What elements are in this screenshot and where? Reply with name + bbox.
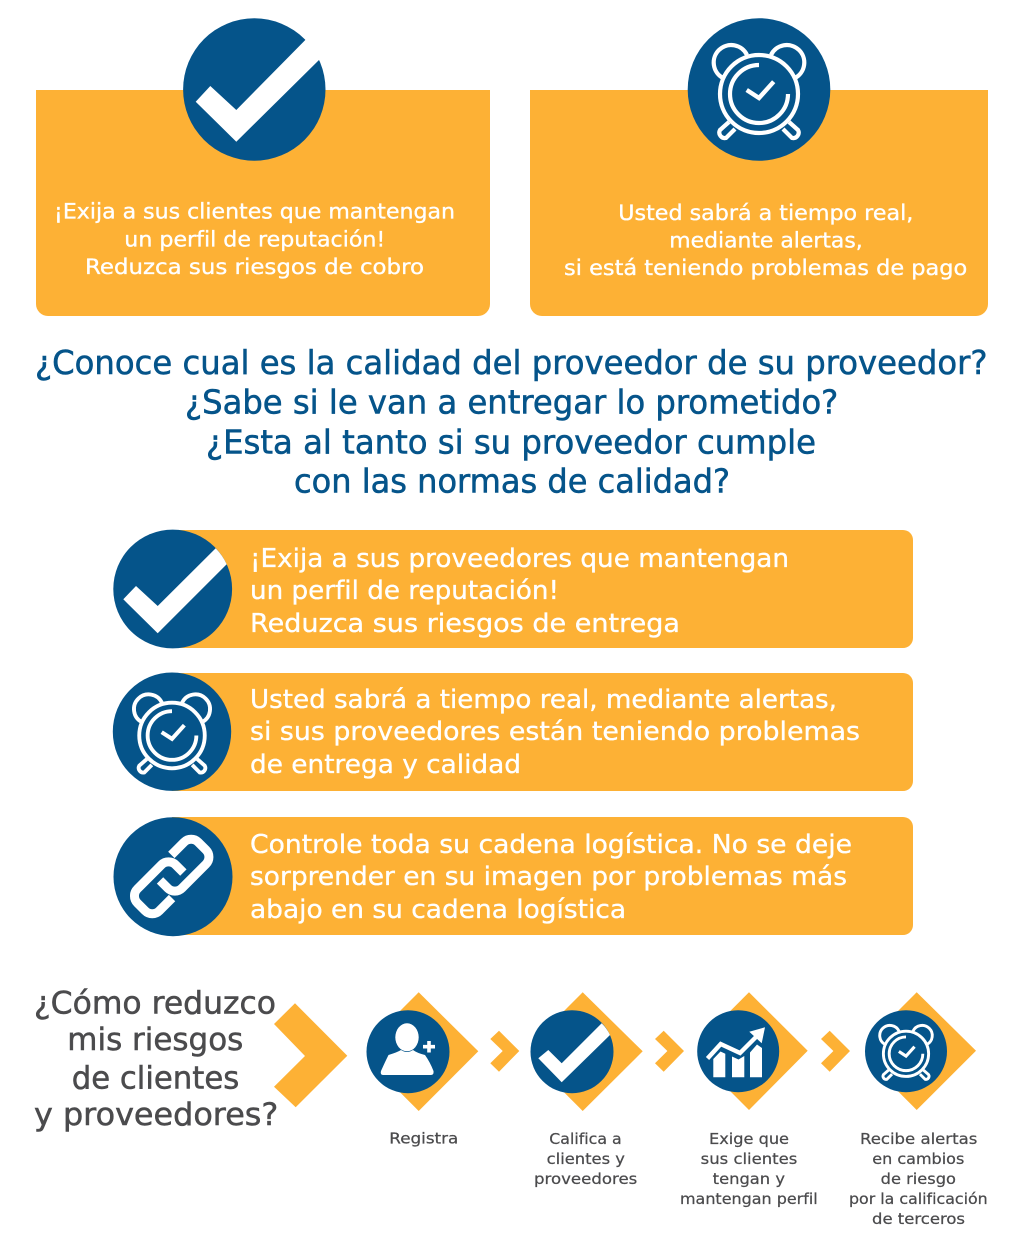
label: califica <box>534 1130 637 1188</box>
heading: how to reduce risks: y proveedores? <box>34 1097 278 1133</box>
icon: alarm clock badge <box>688 18 830 161</box>
text: clientes reputation: un perfil de reputación! <box>124 228 385 252</box>
text: real-time payment alerts: mediante alertas, <box>669 228 863 254</box>
icon: add user <box>366 1010 450 1093</box>
text: supplier alerts: si sus proveedores están teniendo problemas <box>250 717 860 747</box>
label: califica: proveedores <box>534 1170 637 1188</box>
panel: real-time payment alerts <box>530 18 988 316</box>
text: supplier alerts <box>250 685 860 780</box>
icon: check badge <box>113 530 232 648</box>
step: exige <box>680 992 818 1208</box>
icon: growth chart <box>697 1010 779 1092</box>
text: supplier alerts: Usted sabrá a tiempo real, mediante alertas, <box>250 685 837 715</box>
label: registra: Registra <box>389 1129 458 1147</box>
step: califica <box>530 992 643 1188</box>
label: exige: tengan y <box>713 1170 785 1188</box>
text: clientes reputation <box>54 200 455 280</box>
heading: supplier quality questions: ¿Conoce cual es la calidad del proveedor de su proveedor? <box>35 343 988 382</box>
label: califica: clientes y <box>547 1150 625 1168</box>
heading: supplier quality questions <box>35 343 988 500</box>
text: supplier alerts: de entrega y calidad <box>250 750 521 780</box>
text: logistics chain: sorprender en su imagen por problemas más <box>250 862 847 892</box>
panel: supplier alerts <box>113 672 913 791</box>
icon: check badge <box>530 1010 614 1093</box>
icon: chain link badge <box>114 817 232 936</box>
text: proveedores reputation: un perfil de reputación! <box>250 576 559 606</box>
icon: alarm clock badge <box>865 1010 947 1092</box>
label: exige <box>680 1130 818 1208</box>
text: proveedores reputation: Reduzca sus riesgos de entrega <box>250 609 680 639</box>
label: califica: Califica a <box>549 1130 622 1148</box>
step: recibe alertas <box>849 992 988 1228</box>
text: proveedores reputation <box>250 544 789 639</box>
text: real-time payment alerts: si está teniendo problemas de pago <box>564 256 967 281</box>
label: exige: mantengan perfil <box>680 1190 818 1208</box>
arrow: chevron 2 <box>655 1031 684 1072</box>
label: recibe alertas: de terceros <box>872 1210 965 1228</box>
panel: proveedores reputation <box>113 530 913 648</box>
label: recibe alertas: de riesgo <box>881 1170 956 1188</box>
label: exige: Exige que <box>709 1130 789 1148</box>
heading: how to reduce risks <box>34 985 278 1133</box>
heading: supplier quality questions: ¿Esta al tanto si su proveedor cumple <box>206 422 816 461</box>
text: proveedores reputation: ¡Exija a sus proveedores que mantengan <box>250 544 789 574</box>
heading: supplier quality questions: con las normas de calidad? <box>294 461 730 500</box>
label: recibe alertas: Recibe alertas <box>860 1130 977 1148</box>
label: recibe alertas <box>849 1130 988 1228</box>
text: real-time payment alerts <box>564 201 967 281</box>
panel: logistics chain <box>114 817 913 936</box>
text: clientes reputation: Reduzca sus riesgos de cobro <box>85 255 424 280</box>
text: real-time payment alerts: Usted sabrá a tiempo real, <box>618 201 913 226</box>
text: logistics chain: Controle toda su cadena logística. No se deje <box>250 830 852 860</box>
text: clientes reputation: ¡Exija a sus clientes que mantengan <box>54 200 455 224</box>
panel: clientes reputation <box>36 18 490 316</box>
arrow: chevron 1 <box>490 1031 519 1072</box>
label: exige: sus clientes <box>701 1150 797 1168</box>
icon: alarm clock badge <box>113 672 231 791</box>
label: recibe alertas: en cambios <box>872 1150 964 1168</box>
text: logistics chain: abajo en su cadena logística <box>250 895 626 925</box>
step: registra <box>366 992 478 1147</box>
heading: supplier quality questions: ¿Sabe si le van a entregar lo prometido? <box>185 382 838 421</box>
text: logistics chain <box>250 830 852 925</box>
heading: how to reduce risks: de clientes <box>72 1060 239 1096</box>
heading: how to reduce risks: ¿Cómo reduzco <box>34 985 276 1021</box>
label: recibe alertas: por la calificación <box>849 1190 988 1208</box>
icon: check badge <box>183 18 335 161</box>
arrow: chevron 3 <box>821 1031 850 1072</box>
arrow: large chevron <box>274 1003 347 1107</box>
heading: how to reduce risks: mis riesgos <box>67 1022 243 1058</box>
